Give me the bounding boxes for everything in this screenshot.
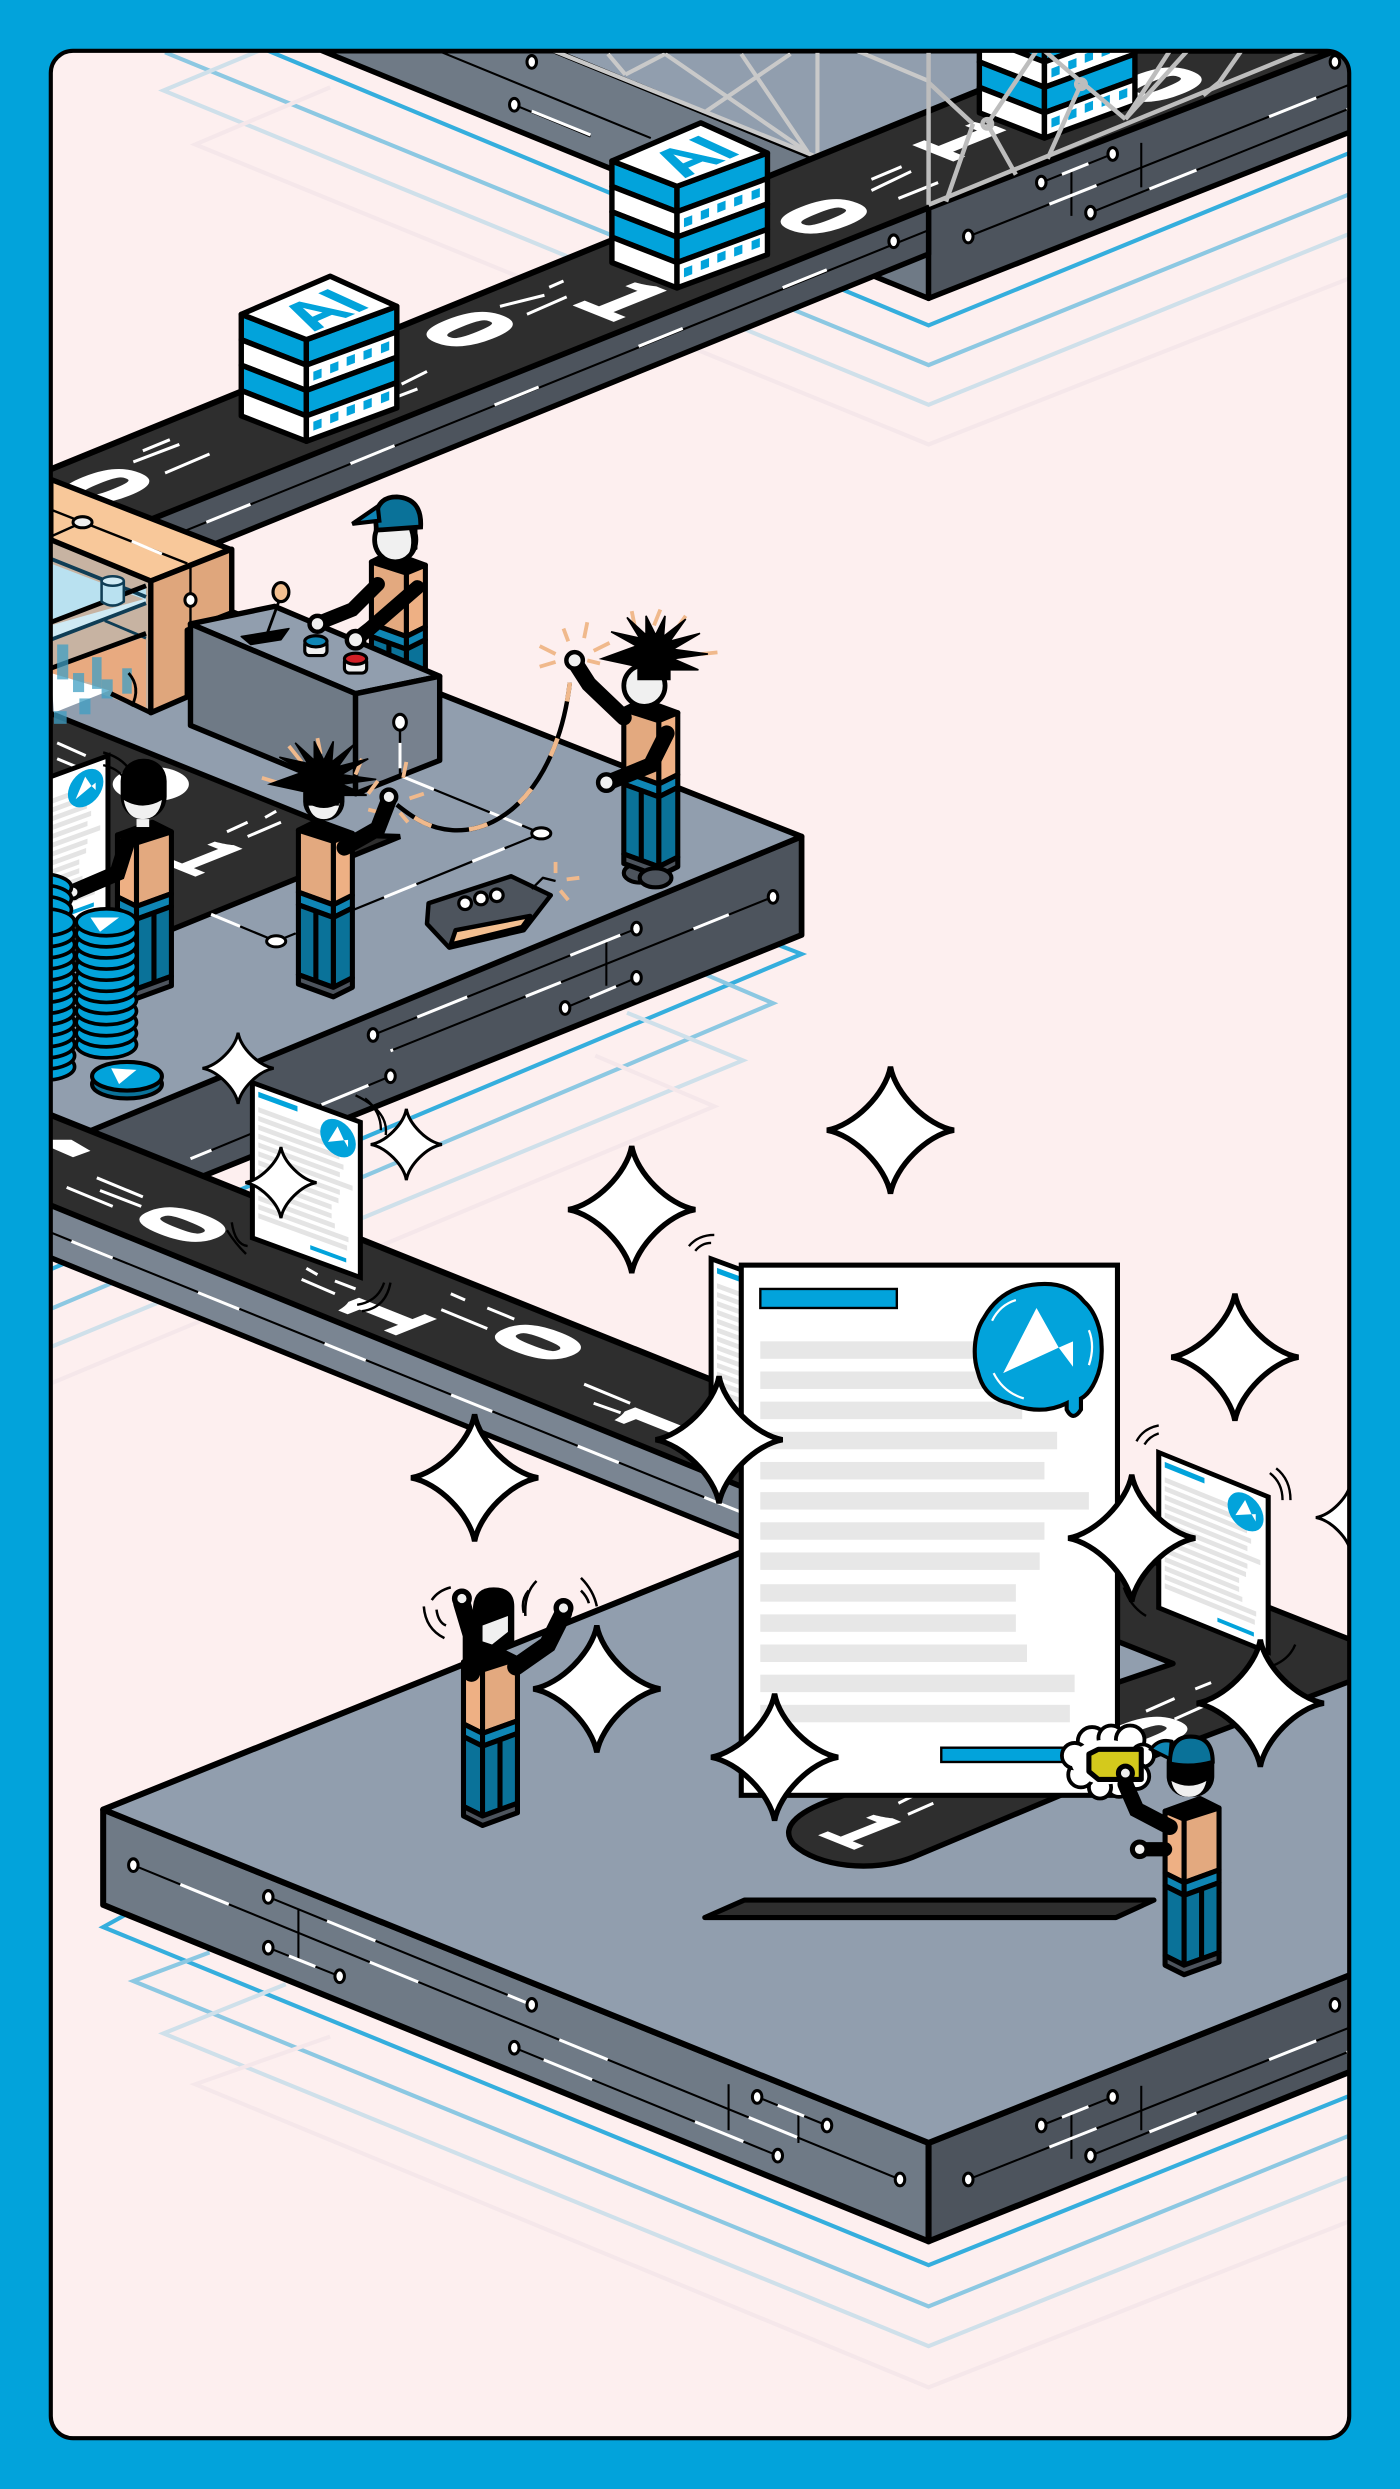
guide lines under bottom platform	[103, 1910, 1351, 2387]
main document	[741, 1265, 1117, 1795]
console	[190, 583, 440, 794]
middle platform top	[52, 610, 804, 1131]
road digit bottom: 1	[787, 1795, 952, 1861]
top platform	[322, 51, 1351, 298]
road markings middle	[56, 742, 282, 877]
road: bottom	[789, 1548, 1351, 1866]
bottom platform right face circuit	[963, 1999, 1351, 2186]
AI block 3	[976, 52, 1138, 141]
road markings middle: 1	[129, 822, 293, 888]
road markings lower middle: 0	[464, 1312, 613, 1372]
top platform left face circuit	[438, 51, 651, 138]
road digits upper: 0	[749, 187, 898, 247]
worker: holding document	[52, 752, 174, 1001]
road digits upper: 0	[395, 300, 544, 359]
road markings lower middle: 1	[562, 1385, 743, 1458]
machine column	[151, 549, 232, 713]
road: upper side strip	[160, 210, 932, 544]
road digit bottom right: 0	[1069, 1705, 1218, 1764]
road speed lines bottom	[898, 1683, 1211, 1814]
document behind	[711, 1259, 819, 1454]
road digits upper: 0	[1084, 55, 1233, 115]
road: lower middle	[52, 1112, 739, 1483]
document footer bar	[941, 1748, 1067, 1762]
road speed lines upper	[133, 167, 938, 473]
coin on floor	[92, 1062, 162, 1098]
bottom platform left face	[103, 1810, 929, 2241]
document header bar	[760, 1289, 897, 1308]
cylinder on shelf	[102, 581, 124, 606]
worker: spiky hair right	[566, 616, 708, 887]
machine interior	[51, 540, 151, 724]
circuit on middle platform	[211, 776, 551, 947]
bottom platform right face	[929, 1975, 1351, 2241]
guide lines under top platform	[163, 51, 1351, 444]
guide lines under middle platform	[49, 943, 802, 1384]
road digits upper: 0	[31, 457, 180, 516]
rope with sparks	[397, 683, 570, 830]
road: upper	[49, 51, 1335, 560]
road digits upper	[31, 55, 1233, 516]
middle platform right face	[98, 834, 804, 1176]
road markings lower middle: 1	[286, 1276, 467, 1348]
truss back	[554, 51, 929, 157]
worker: operator with cap	[321, 494, 428, 668]
road markings lower middle: 0	[109, 1195, 258, 1255]
machine: orange box	[51, 479, 232, 724]
camera	[1089, 1749, 1141, 1779]
road: middle U-turn	[49, 713, 400, 979]
AI block 2	[612, 123, 767, 288]
road digits upper: 1	[880, 101, 1062, 174]
coin stacks	[52, 873, 138, 1082]
AI block 2: AI	[632, 129, 755, 184]
bottom platform left face circuit	[129, 1859, 905, 2186]
smoke cloud	[1062, 1725, 1154, 1798]
top platform right face circuit	[963, 56, 1351, 243]
machine roof	[51, 479, 230, 581]
motion marks	[103, 752, 714, 1311]
worker: photographer	[1062, 1725, 1219, 1975]
truss front	[929, 51, 1305, 205]
document on road	[252, 1083, 360, 1277]
sparks	[262, 610, 717, 900]
document text lines	[760, 1341, 1089, 1722]
motion marks right	[1124, 1425, 1295, 1667]
AI block 1	[241, 276, 397, 441]
road digits upper: 1	[541, 261, 722, 334]
pixelated projection	[51, 644, 132, 724]
road: lower middle side strip	[52, 1209, 739, 1540]
sparkles	[203, 1033, 1386, 1821]
bottom platform top	[103, 1552, 1351, 2143]
road markings lower middle	[51, 1140, 743, 1458]
opened box	[427, 876, 556, 948]
slab shadow	[705, 1900, 1154, 1918]
worker: cheering	[424, 1578, 597, 1825]
document: small right	[1159, 1452, 1268, 1652]
seal	[975, 1284, 1102, 1416]
worker: spiky hair left	[270, 741, 396, 997]
AI block 1: AI	[261, 282, 384, 337]
